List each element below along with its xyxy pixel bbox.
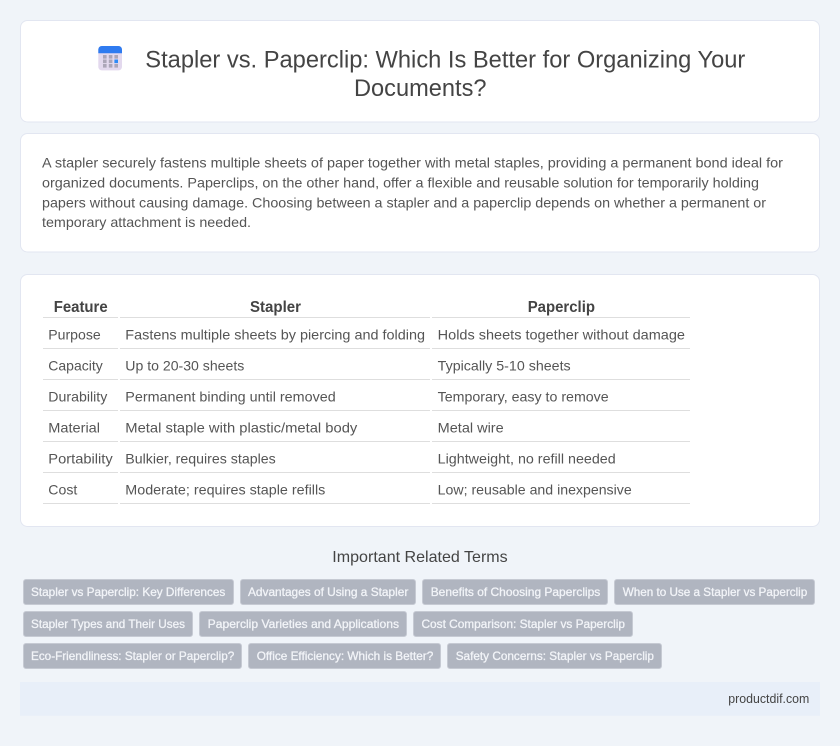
row: material: Material — [48, 419, 100, 435]
row: material — [48, 419, 504, 435]
tag — [414, 612, 632, 636]
tag: Office Efficiency: Which is Better? — [257, 649, 434, 663]
row: capacity: Capacity — [48, 357, 103, 373]
row: durability: Temporary, easy to remove — [438, 388, 609, 404]
tag — [422, 580, 608, 604]
footer bar — [20, 682, 820, 716]
tag — [240, 580, 416, 604]
tag: Stapler vs Paperclip: Key Differences — [31, 585, 225, 599]
row: material: Metal wire — [438, 419, 504, 435]
row: durability — [48, 388, 609, 404]
tag — [614, 580, 814, 604]
row: durability: Permanent binding until removed — [125, 388, 336, 404]
row: portability: Portability — [48, 450, 113, 466]
row: cost: Low; reusable and inexpensive — [438, 481, 632, 497]
title: Stapler vs. Paperclip: Which Is Better for Organizing Your — [145, 46, 745, 74]
panel: description — [20, 134, 820, 252]
row: purpose: Fastens multiple sheets by piercing and folding — [125, 326, 425, 342]
table header: Feature — [54, 299, 108, 316]
row: portability: Bulkier, requires staples — [125, 450, 276, 466]
panel: description: organized documents. Paperclips, on the other hand, offer a flexible and reusable solution for temporarily holding — [42, 174, 759, 190]
table header — [54, 299, 595, 316]
row: cost — [48, 481, 632, 497]
panel: description: papers without causing damage. Choosing between a stapler and a paperclip depends on whether a permanent or — [42, 194, 766, 210]
row: capacity: Typically 5-10 sheets — [438, 357, 571, 373]
heading: related terms: Important Related Terms — [332, 549, 508, 566]
row: purpose — [48, 326, 685, 342]
tag: When to Use a Stapler vs Paperclip — [623, 585, 808, 599]
tag — [200, 612, 406, 636]
row: purpose: Holds sheets together without damage — [438, 326, 685, 342]
row: cost: Moderate; requires staple refills — [125, 481, 325, 497]
footer bar: productdif.com — [728, 692, 809, 706]
row: durability: Durability — [48, 388, 107, 404]
related term tags — [24, 580, 814, 668]
table header: Paperclip — [528, 299, 595, 316]
panel: comparison table — [20, 274, 820, 526]
tag — [24, 612, 192, 636]
row: capacity — [48, 357, 571, 373]
row: capacity: Up to 20-30 sheets — [125, 357, 244, 373]
tag: Cost Comparison: Stapler vs Paperclip — [422, 617, 625, 631]
tag: Paperclip Varieties and Applications — [208, 617, 399, 631]
tag — [248, 644, 440, 668]
tag: Safety Concerns: Stapler vs Paperclip — [456, 649, 654, 663]
tag — [448, 644, 662, 668]
row: purpose: Purpose — [48, 326, 101, 342]
table header: Stapler — [250, 299, 301, 316]
panel: title card — [20, 20, 820, 122]
tag — [24, 580, 234, 604]
tag: Advantages of Using a Stapler — [248, 585, 408, 599]
panel: description: temporary attachment is needed. — [42, 214, 251, 230]
tag — [24, 644, 242, 668]
row: material: Metal staple with plastic/metal body — [125, 419, 357, 435]
title — [145, 46, 745, 102]
row: cost: Cost — [48, 481, 77, 497]
panel: description: A stapler securely fastens multiple sheets of paper together with metal staples, providing a permanent bond ideal for — [42, 154, 783, 170]
tag: Eco-Friendliness: Stapler or Paperclip? — [31, 649, 235, 663]
icon: calendar — [98, 46, 122, 70]
row: portability: Lightweight, no refill needed — [438, 450, 616, 466]
tag: Stapler Types and Their Uses — [31, 617, 185, 631]
tag: Benefits of Choosing Paperclips — [431, 585, 600, 599]
row: portability — [48, 450, 616, 466]
title: Documents? — [354, 75, 486, 102]
